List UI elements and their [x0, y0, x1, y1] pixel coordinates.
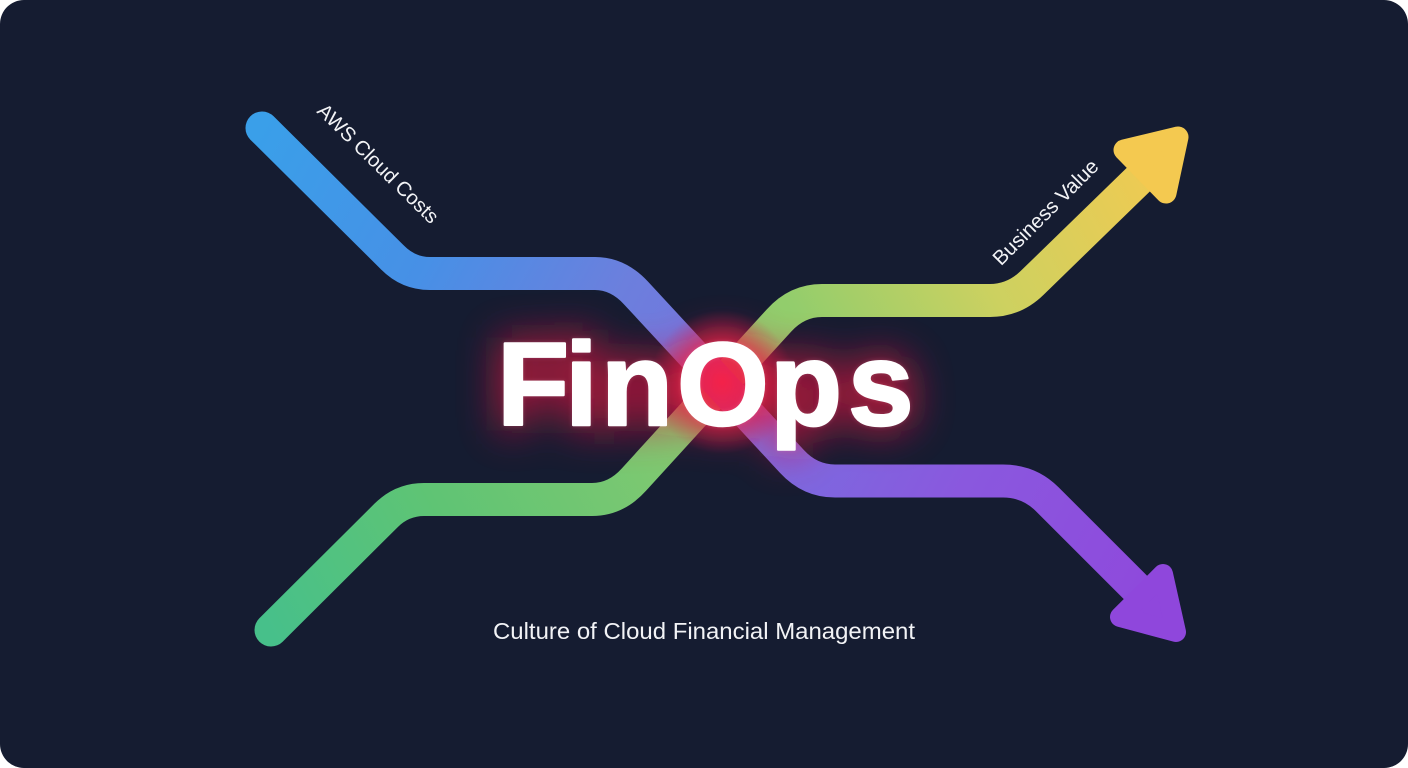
label: AWS Cloud Costs: AWS Cloud Costs: [312, 100, 443, 228]
heading: FinOps: FinOps: [497, 319, 914, 451]
heading: FinOps: FinOps: [497, 319, 914, 451]
intersection glow: [650, 310, 794, 454]
label: Business Value: Business Value: [988, 155, 1103, 270]
arrow: green to yellow, business value: [271, 137, 1178, 630]
arrow: blue to purple, cloud costs: [262, 128, 1176, 632]
caption: culture: Culture of Cloud Financial Management: [493, 618, 915, 644]
heading: FinOps: FinOps: [497, 319, 914, 451]
